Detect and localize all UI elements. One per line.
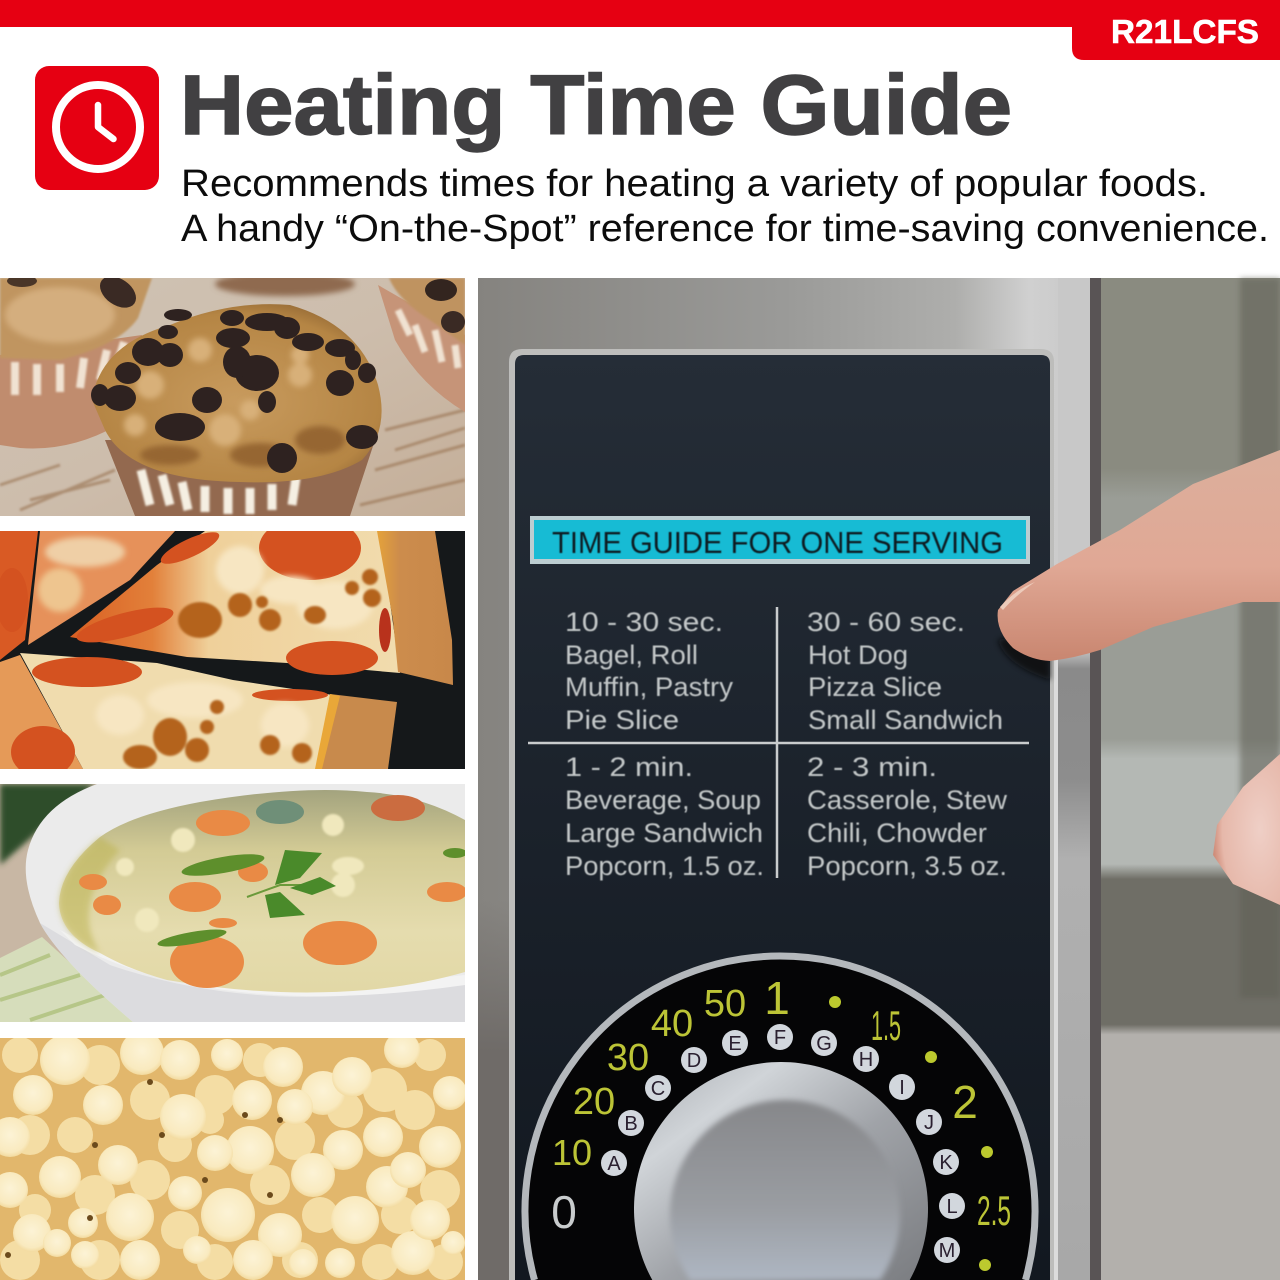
parsley garnish	[247, 850, 336, 918]
table cell: 30-60 sec: Small Sandwich	[808, 705, 1003, 735]
lettered preset buttons: L	[946, 1196, 958, 1218]
table cell: 2-3 min: Popcorn, 3.5 oz.	[807, 851, 1007, 881]
lettered preset buttons: B	[624, 1113, 638, 1135]
table cell: 10-30 sec: Muffin, Pastry	[565, 672, 734, 702]
lettered preset buttons: H	[859, 1049, 873, 1071]
lettered preset buttons: K	[939, 1152, 953, 1174]
lettered preset buttons	[601, 1024, 965, 1263]
title: Heating Time Guide	[180, 58, 1012, 152]
yellow time numbers: 2	[952, 1076, 978, 1128]
lower finger	[1213, 754, 1280, 905]
yellow time numbers	[551, 972, 1011, 1238]
table cell: 10-30 sec: Bagel, Roll	[565, 640, 698, 670]
table cell: 30-60 sec: Hot Dog	[808, 640, 908, 670]
subtitle text: Recommends times for heating a variety of popular foods.	[181, 163, 1208, 205]
lower slice	[20, 653, 333, 769]
timer dial	[525, 956, 1035, 1280]
lettered preset buttons: E	[728, 1033, 742, 1055]
model number: R21LCFS	[1111, 13, 1259, 50]
left slices	[28, 531, 175, 645]
table cell: 1-2 min: Beverage, Soup	[565, 785, 761, 815]
top slice	[70, 531, 400, 673]
yellow time numbers: 50	[704, 983, 746, 1025]
bowl	[26, 784, 465, 1022]
photo: muffins	[0, 270, 465, 516]
lettered preset buttons: J	[924, 1112, 934, 1134]
panel shadow under fingertip	[998, 635, 1050, 680]
yellow time numbers: 0	[551, 1186, 577, 1238]
table cell: 10-30 sec	[565, 607, 734, 735]
popcorn puffs	[0, 1031, 467, 1280]
background behind microwave	[1100, 278, 1280, 1280]
lettered preset buttons: I	[899, 1077, 905, 1099]
yellow dots	[829, 996, 993, 1271]
table cell: 10-30 sec: 10 - 30 sec.	[565, 607, 723, 637]
lettered preset buttons: M	[939, 1240, 955, 1262]
vegetables	[79, 795, 467, 988]
photo: soup	[0, 784, 467, 1022]
lettered preset buttons: A	[607, 1153, 621, 1175]
table cell: 1-2 min: 1 - 2 min.	[565, 752, 693, 782]
table cell: 1-2 min: Large Sandwich	[565, 818, 763, 848]
yellow time numbers: 40	[651, 1003, 693, 1045]
subtitle text: A handy “On-the-Spot” reference for time-saving convenience.	[181, 208, 1269, 250]
yellow time numbers: 10	[552, 1132, 592, 1173]
lettered preset buttons: D	[687, 1050, 701, 1072]
time guide header	[530, 516, 1030, 564]
table dividers	[528, 607, 1029, 878]
table cell: 30-60 sec: Pizza Slice	[808, 672, 942, 702]
top red bar with model tab	[0, 0, 1280, 60]
soup surface	[59, 790, 465, 992]
yellow time numbers: 1.5	[871, 1002, 901, 1049]
chocolate chips	[91, 309, 378, 473]
popcorn filler	[0, 1037, 463, 1280]
left muffin	[0, 270, 152, 449]
silver knob	[634, 1062, 928, 1280]
centre muffin wrapper	[105, 440, 375, 516]
right muffin	[378, 278, 465, 412]
table cell: 2-3 min	[807, 752, 1007, 881]
table cell: 30-60 sec	[807, 607, 1003, 735]
photo: pizza	[0, 516, 465, 778]
table cell: 30-60 sec: 30 - 60 sec.	[807, 607, 965, 637]
icon: red clock	[35, 66, 159, 190]
centre muffin top	[92, 304, 382, 482]
upper hand finger pressing panel	[998, 450, 1280, 661]
table cell: 1-2 min: Popcorn, 1.5 oz.	[565, 851, 764, 881]
subtitle text	[181, 163, 1269, 250]
yellow time numbers: 30	[607, 1037, 649, 1079]
control panel	[509, 349, 1054, 1280]
table cell: 2-3 min: Casserole, Stew	[807, 785, 1007, 815]
table cell: 1-2 min	[565, 752, 764, 881]
pepperoni	[9, 531, 391, 769]
table cell: 2-3 min: Chili, Chowder	[807, 818, 987, 848]
table cell: 2-3 min: 2 - 3 min.	[807, 752, 937, 782]
popcorn gaps and hulls	[5, 1079, 283, 1258]
table cell: 10-30 sec: Pie Slice	[565, 705, 679, 735]
yellow time numbers: 1	[764, 972, 790, 1024]
microwave steel front	[478, 278, 1101, 1280]
lettered preset buttons: F	[774, 1027, 786, 1049]
yellow time numbers: 2.5	[977, 1187, 1011, 1234]
time guide header: TIME GUIDE FOR ONE SERVING	[552, 525, 1003, 560]
lettered preset buttons: G	[816, 1033, 832, 1055]
yellow time numbers: 20	[573, 1081, 615, 1123]
lettered preset buttons: C	[651, 1078, 665, 1100]
melted cheese spots	[96, 546, 373, 747]
photo: popcorn	[0, 1031, 467, 1280]
